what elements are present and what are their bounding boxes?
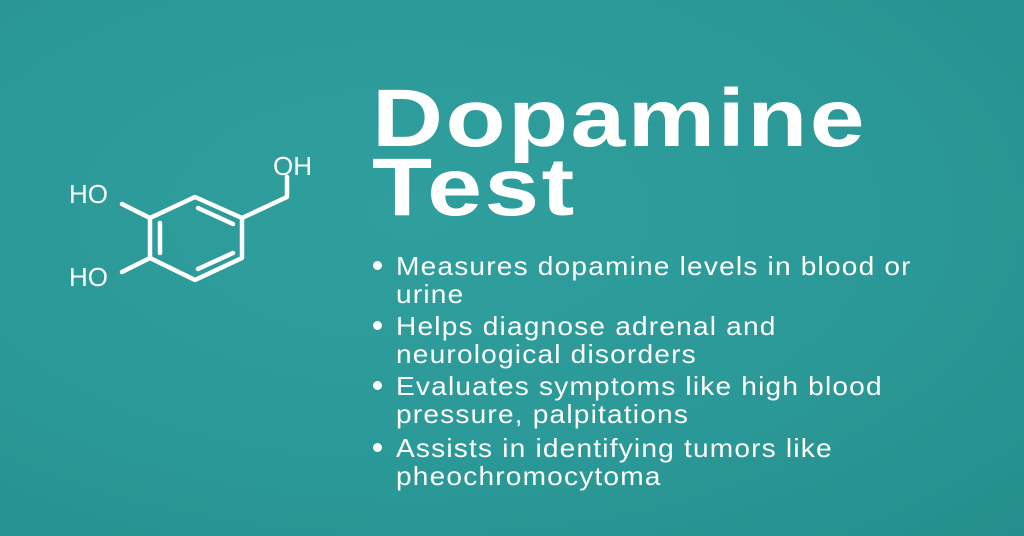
- bullet list: pheochromocytoma: [396, 461, 662, 491]
- icon: dopamine molecule: OH: [273, 151, 312, 181]
- icon: dopamine molecule: HO: [69, 179, 108, 209]
- title: Test: [372, 142, 577, 233]
- bullet list: Measures dopamine levels in blood or: [396, 251, 912, 281]
- bullet list: neurological disorders: [396, 339, 697, 369]
- icon: dopamine molecule: [69, 151, 312, 292]
- icon: dopamine molecule: HO: [69, 262, 108, 292]
- bullet list: Helps diagnose adrenal and: [396, 311, 777, 341]
- bullet list: urine: [396, 279, 464, 309]
- bullet list: Assists in identifying tumors like: [396, 433, 833, 463]
- title: Dopamine: [372, 73, 867, 164]
- bullet list: pressure, palpitations: [396, 399, 689, 429]
- bullet list: Evaluates symptoms like high blood: [396, 371, 883, 401]
